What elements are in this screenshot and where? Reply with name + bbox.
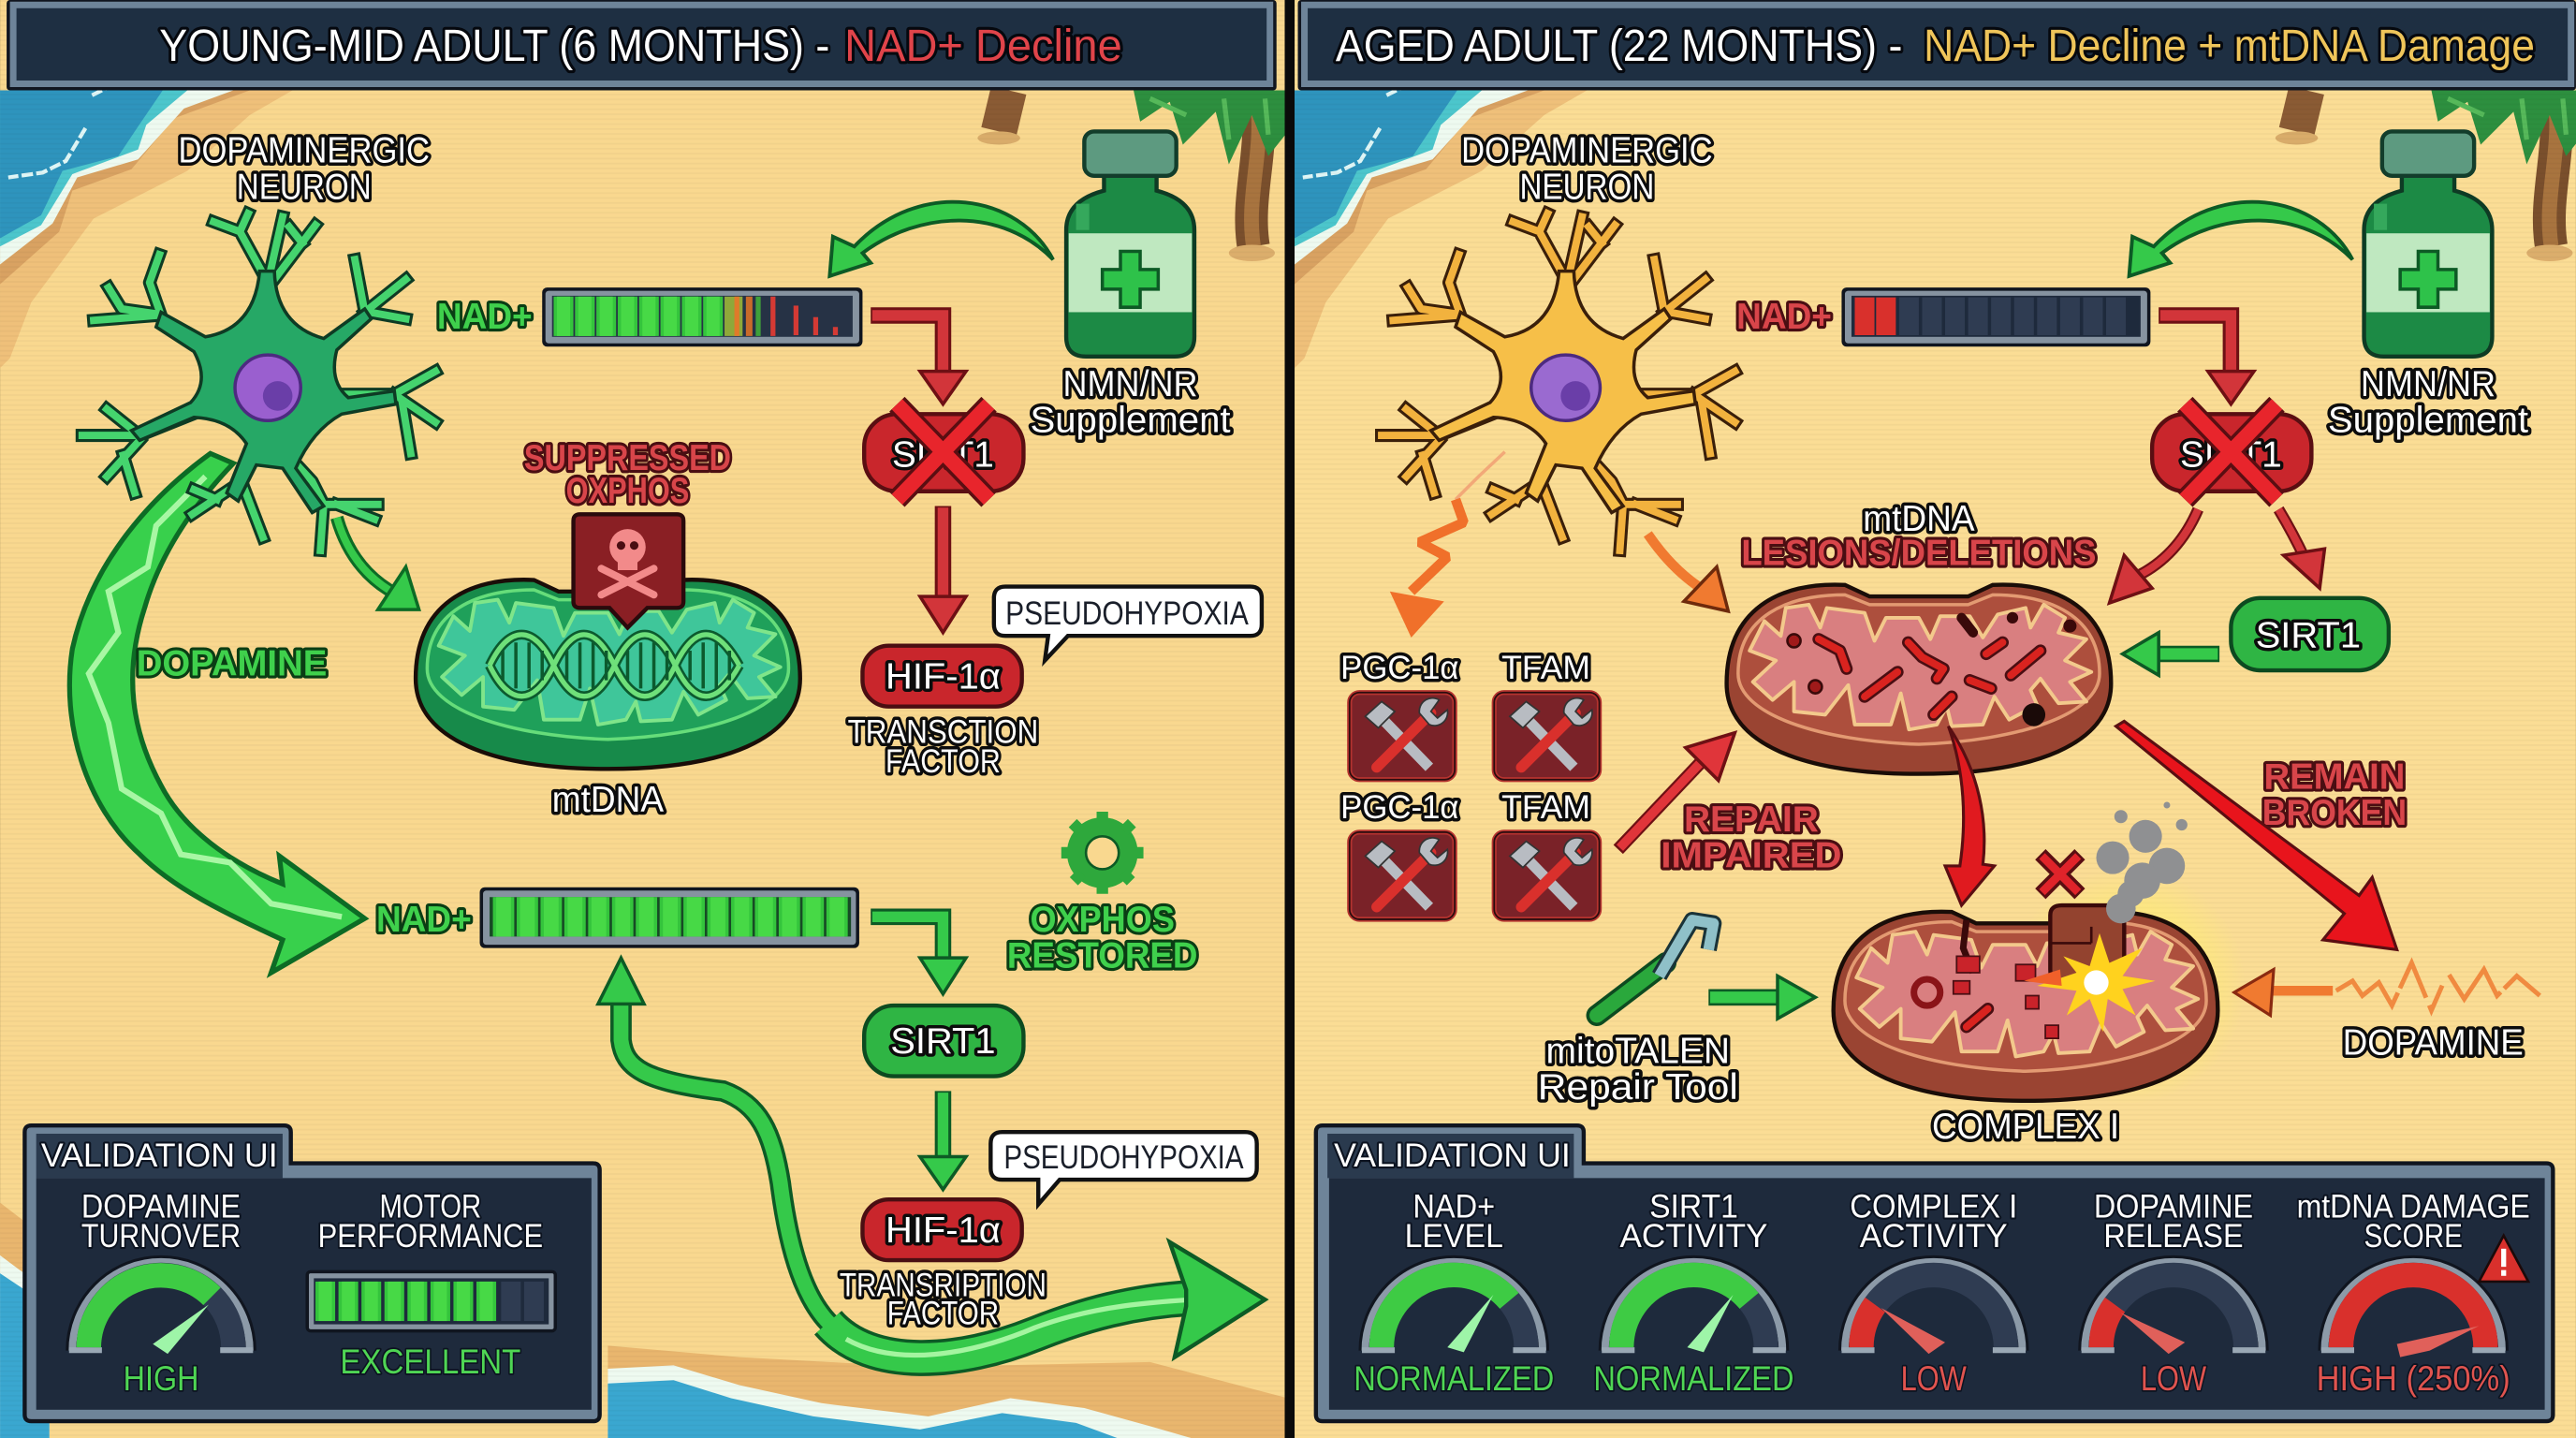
beach shoreline top left <box>0 72 292 368</box>
panel: validation UI right: VALIDATION UI <box>1334 1137 1571 1174</box>
label: repair impaired: REPAIR <box>1684 800 1819 840</box>
metric: dopamine turnover: DOPAMINE <box>81 1188 241 1225</box>
pill: SIRT1 active right: SIRT1 <box>2256 615 2361 655</box>
label: oxphos restored <box>1007 900 1197 976</box>
label: oxphos restored: OXPHOS <box>1030 900 1175 940</box>
label: suppressed oxphos <box>524 438 731 511</box>
panel: validation UI right <box>1316 1125 2553 1421</box>
metric: dopamine release: LOW <box>2141 1359 2206 1398</box>
label: NMN/NR supplement right <box>2328 364 2528 441</box>
palm trees right panel <box>2276 91 2576 261</box>
metric: NAD+ level: NAD+ <box>1412 1188 1495 1225</box>
metric: dopamine release: DOPAMINE <box>2094 1188 2253 1225</box>
arrow: lesions to complex I <box>1945 726 1995 905</box>
label: transcription factor lower: TRANSRIPTION <box>840 1268 1046 1304</box>
mitochondrion: complex I damaged <box>1834 905 2217 1101</box>
arrow: repair impaired <box>1618 733 1734 849</box>
label: TFAM top: TFAM <box>1501 650 1590 686</box>
label: NMN/NR supplement left <box>1030 364 1231 441</box>
explosion <box>2024 933 2156 1032</box>
labels and icons: repair factors <box>1340 650 1600 919</box>
header: young-mid adult: NAD+ Decline <box>844 21 1122 71</box>
arrow: SIRT1 to damaged mitochondrion <box>2110 509 2198 603</box>
metric: SIRT1 activity: ACTIVITY <box>1620 1218 1767 1255</box>
arrow: long recovery loop <box>598 958 1265 1358</box>
pill: SIRT1 inhibited right: SIRT1 <box>2180 434 2282 475</box>
header: young-mid adult: YOUNG-MID ADULT (6 MONTHS) - <box>159 21 829 71</box>
icon: tools 1 <box>1350 693 1455 780</box>
label: transcription factor lower <box>840 1268 1046 1332</box>
metric: motor performance: PERFORMANCE <box>318 1218 543 1255</box>
pill: SIRT1 inhibited right <box>2152 404 2311 500</box>
pill: HIF-1a lower: HIF-1α <box>886 1211 1001 1251</box>
icon: NMN/NR bottle left <box>1066 131 1194 357</box>
icon: mitoTALEN wrench <box>1597 920 1714 1016</box>
label: transcription factor top: TRANSCTION <box>848 713 1038 750</box>
nucleus <box>1531 355 1600 420</box>
metric: SIRT1 activity <box>1593 1188 1794 1398</box>
arrow: NAD+ to SIRT1 green <box>871 917 966 994</box>
metric: dopamine turnover: HIGH <box>124 1359 198 1398</box>
label: dopaminergic neuron right <box>1461 131 1713 207</box>
callout: pseudohypoxia lower: PSEUDOHYPOXIA <box>1003 1139 1244 1176</box>
lesions <box>1788 612 2076 726</box>
arrow: dopamine axon <box>69 453 365 973</box>
arrow: neuron to damaged mitochondrion <box>1647 534 1728 611</box>
label: NMN/NR supplement right: NMN/NR <box>2361 364 2496 404</box>
icon: red X <box>2041 855 2080 894</box>
label: NAD+ right: NAD+ <box>1736 297 1832 337</box>
label: mitoTALEN repair tool: mitoTALEN <box>1546 1032 1730 1072</box>
label: mtDNA lesions: LESIONS/DELETIONS <box>1741 534 2096 574</box>
icon: smoke <box>2096 801 2188 923</box>
panel: validation UI left: VALIDATION UI <box>41 1137 278 1174</box>
metric: dopamine turnover: TURNOVER <box>81 1218 241 1255</box>
icon: gear <box>1061 812 1144 894</box>
label: TFAM bottom: TFAM <box>1501 789 1590 826</box>
icon: tools 2 <box>1494 693 1600 780</box>
header: aged adult <box>1298 0 2576 91</box>
label: remain broken: REMAIN <box>2263 756 2405 797</box>
arrow: NAD+ to SIRT1 red right <box>2159 315 2254 404</box>
metric: complex I activity: COMPLEX I <box>1850 1188 2017 1225</box>
label: repair impaired: IMPAIRED <box>1661 836 1841 876</box>
callout: pseudohypoxia lower <box>990 1132 1257 1204</box>
arrow: SIRT1 to HIF green <box>920 1091 966 1190</box>
callout: pseudohypoxia top <box>994 587 1262 661</box>
metric: dopamine turnover <box>69 1188 253 1398</box>
bar: restored NAD+ <box>480 888 859 948</box>
pill: SIRT1 active right <box>2231 598 2389 670</box>
arrow: big red to dopamine <box>2116 721 2397 949</box>
arrow: supplement to NAD+ right <box>2130 202 2352 276</box>
label: transcription factor lower: FACTOR <box>887 1296 999 1332</box>
metric: NAD+ level <box>1354 1188 1554 1398</box>
arrow: neuron to mitochondrion <box>337 518 419 609</box>
label: transcription factor top: FACTOR <box>886 743 1001 780</box>
neuron: yellow aged <box>1382 213 1734 550</box>
pill: HIF-1a top <box>862 646 1022 707</box>
label: NAD+ top: NAD+ <box>437 297 533 337</box>
beach shoreline top right panel <box>1295 72 1587 368</box>
icon: warning triangle <box>2479 1236 2528 1282</box>
arrow: lightning to repair factors <box>1390 452 1505 638</box>
label: dopaminergic neuron right: DOPAMINERGIC <box>1461 131 1713 171</box>
metric: SIRT1 activity: SIRT1 <box>1649 1188 1738 1225</box>
label: suppressed oxphos: SUPPRESSED <box>524 438 731 478</box>
arrow: NAD+ to SIRT1 red <box>871 315 966 404</box>
icon: tools 3 <box>1350 832 1455 919</box>
neuron: green healthy <box>82 213 435 550</box>
metric: mtDNA damage score <box>2297 1188 2530 1398</box>
arrow: SIRT1 to active SIRT1 <box>2278 509 2324 588</box>
metric: complex I activity <box>1841 1188 2026 1398</box>
label: dopaminergic neuron left: NEURON <box>237 167 372 207</box>
label: transcription factor top <box>848 713 1038 780</box>
label: NMN/NR supplement left: Supplement <box>1030 401 1231 441</box>
label: mtDNA lesions: mtDNA <box>1863 499 1975 539</box>
metric: mtDNA damage score: mtDNA DAMAGE <box>2297 1188 2530 1225</box>
metric: motor performance: MOTOR <box>379 1188 481 1225</box>
nucleus <box>235 355 300 420</box>
mitochondrion: green with mtDNA <box>416 580 800 769</box>
label: mtDNA lesions <box>1741 499 2096 574</box>
pill: HIF-1a top: HIF-1α <box>886 656 1001 697</box>
icon: NMN/NR bottle right <box>2364 131 2492 357</box>
metric: NAD+ level: NORMALIZED <box>1354 1359 1554 1398</box>
label: suppressed oxphos: OXPHOS <box>566 471 689 511</box>
label: dopaminergic neuron right: NEURON <box>1519 167 1654 207</box>
metric: motor performance: EXCELLENT <box>340 1343 520 1381</box>
panel: validation UI left <box>24 1125 600 1421</box>
arrow: dopamine to complex I orange <box>2234 969 2333 1016</box>
dopamine signal squiggle <box>2336 962 2539 1010</box>
metric: dopamine release <box>2082 1188 2265 1398</box>
label: remain broken: BROKEN <box>2262 793 2407 833</box>
label: dopaminergic neuron left: DOPAMINERGIC <box>178 131 430 171</box>
panel: aged adult background <box>1295 0 2576 1438</box>
DNA helix <box>490 635 739 697</box>
label: PGC-1a bottom: PGC-1α <box>1340 789 1459 826</box>
label: repair impaired <box>1661 800 1841 876</box>
label: NAD+ lower: NAD+ <box>376 900 472 940</box>
label: oxphos restored: RESTORED <box>1007 936 1197 976</box>
header: young-mid adult <box>7 0 1277 91</box>
arrow: SIRT1 to HIF red <box>920 506 966 633</box>
label: PGC-1a top: PGC-1α <box>1340 650 1459 686</box>
pill: SIRT1 inhibited left <box>864 404 1023 500</box>
arrow: supplement to NAD+ left <box>829 202 1053 276</box>
mitochondrion: damaged with lesions <box>1727 585 2111 774</box>
label: NMN/NR supplement left: NMN/NR <box>1063 364 1197 404</box>
pill: SIRT1 active left: SIRT1 <box>890 1021 996 1062</box>
panel: young-mid adult background <box>0 0 1288 1438</box>
metric: complex I activity: LOW <box>1901 1359 1967 1398</box>
header: aged adult: NAD+ Decline + mtDNA Damage <box>1924 21 2535 71</box>
metric: mtDNA damage score: HIGH (250%) <box>2317 1359 2510 1398</box>
label: complex I: COMPLEX I <box>1932 1107 2119 1147</box>
label: dopamine right: DOPAMINE <box>2343 1023 2524 1064</box>
icon: tools 4 <box>1494 832 1600 919</box>
callout: pseudohypoxia top: PSEUDOHYPOXIA <box>1005 595 1249 632</box>
metric: complex I activity: ACTIVITY <box>1860 1218 2008 1255</box>
label: dopamine: DOPAMINE <box>137 643 327 683</box>
bar: depleted NAD+ <box>1841 287 2150 346</box>
arrow: tool to complex I <box>1708 976 1815 1019</box>
palm trees <box>977 91 1288 261</box>
metric: mtDNA damage score: SCORE <box>2364 1218 2463 1255</box>
pill: HIF-1a lower <box>862 1199 1022 1260</box>
label: dopaminergic neuron left <box>178 131 430 207</box>
label: NMN/NR supplement right: Supplement <box>2328 401 2528 441</box>
pill: SIRT1 inhibited left: SIRT1 <box>892 434 994 475</box>
label: mitoTALEN repair tool <box>1538 1032 1738 1108</box>
bar: declining NAD+ <box>542 287 862 346</box>
label: mitoTALEN repair tool: Repair Tool <box>1538 1067 1738 1108</box>
metric: dopamine release: RELEASE <box>2103 1218 2244 1255</box>
metric: NAD+ level: LEVEL <box>1405 1218 1503 1255</box>
glow behind complex I <box>2009 868 2246 1104</box>
pill: SIRT1 active left <box>864 1005 1023 1077</box>
label: mtDNA: mtDNA <box>552 780 664 820</box>
metric: motor performance <box>307 1188 555 1381</box>
damage details <box>1914 905 2124 1038</box>
label: remain broken <box>2262 756 2407 833</box>
arrow: SIRT1 to mitochondrion green <box>2123 633 2219 675</box>
icon: skull warning badge <box>574 514 683 627</box>
header: aged adult: AGED ADULT (22 MONTHS) - <box>1336 21 1902 71</box>
beach shoreline bottom <box>0 1203 1288 1438</box>
metric: SIRT1 activity: NORMALIZED <box>1593 1359 1794 1398</box>
